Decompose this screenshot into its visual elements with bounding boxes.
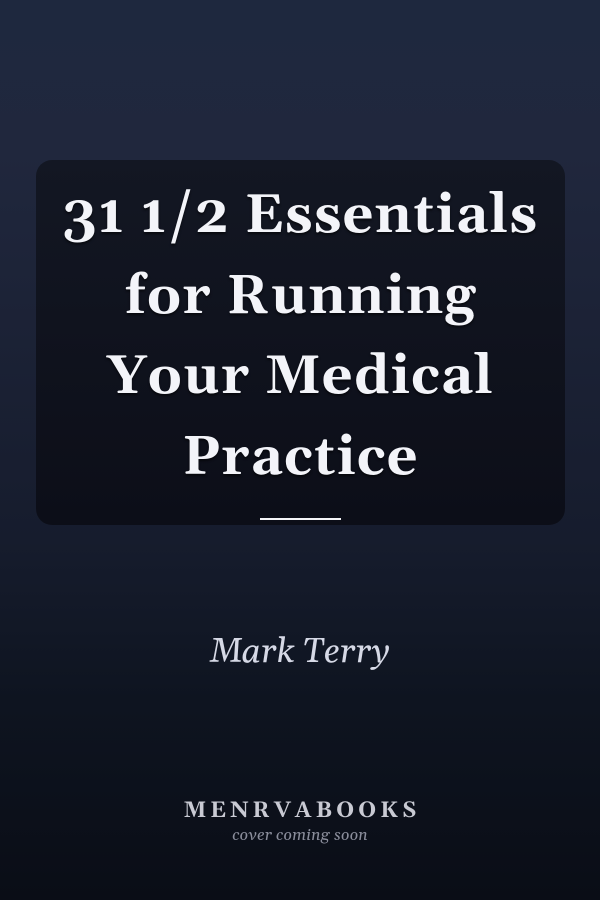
title: Practice: [182, 425, 419, 493]
cover note: cover coming soon: [232, 826, 368, 846]
title: Your Medical: [107, 344, 494, 412]
author: Mark Terry: [210, 630, 390, 674]
title: [63, 183, 538, 493]
divider rule: [260, 518, 341, 520]
title: for Running: [124, 264, 477, 332]
publisher: MENRVABOOKS: [184, 797, 420, 825]
title: 31 1/2 Essentials: [63, 183, 538, 251]
panel: title background: [36, 160, 565, 525]
